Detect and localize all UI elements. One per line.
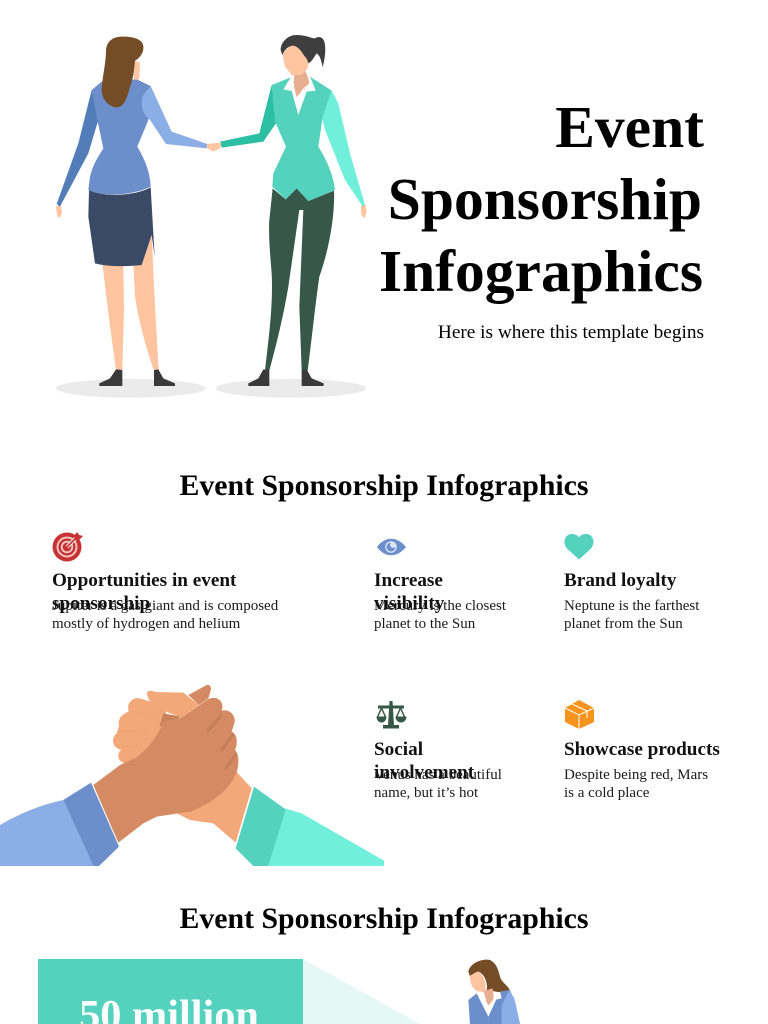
heading: section 2: Event Sponsorship Infographics (180, 902, 588, 935)
title: Infographics (379, 238, 703, 304)
item: showcase products: Despite being red, Mars (564, 767, 708, 783)
item: social involvement (374, 701, 502, 801)
item: increase visibility: Mercury is the closest (374, 598, 507, 614)
item: brand loyalty: Neptune is the farthest (564, 598, 700, 614)
item: opportunities in event sponsorship: mostly of hydrogen and helium (52, 616, 241, 632)
icon: handshake (207, 143, 221, 152)
illustration: clasped hands (0, 685, 384, 866)
heading: section 1: Event Sponsorship Infographics (180, 469, 588, 502)
item: showcase products (564, 700, 720, 801)
title: Sponsorship (388, 166, 702, 232)
title (379, 94, 704, 304)
item: brand loyalty: Brand loyalty (564, 570, 677, 591)
item: opportunities in event sponsorship: sponsorship (52, 593, 150, 614)
item: brand loyalty: planet from the Sun (564, 616, 683, 632)
icon: target (52, 532, 83, 562)
shadow: floor ellipses (56, 379, 366, 398)
icon: box (565, 700, 594, 729)
item: increase visibility: Increase (374, 570, 443, 591)
item: increase visibility: visibility (374, 593, 445, 614)
item: increase visibility (374, 539, 507, 632)
item: opportunities in event sponsorship: Jupiter is a gas giant and is composed (52, 598, 279, 614)
item: opportunities in event sponsorship: Opportunities in event (52, 570, 237, 591)
figure: left woman (56, 37, 207, 386)
title: Event (555, 94, 704, 160)
pointer wedge (303, 959, 420, 1024)
icon: scales (376, 701, 406, 728)
item: increase visibility: planet to the Sun (374, 616, 476, 632)
item: showcase products: Showcase products (564, 739, 720, 760)
figure: woman presenter (468, 960, 520, 1024)
item: opportunities in event sponsorship (52, 532, 279, 632)
item: social involvement: name, but it’s hot (374, 785, 479, 801)
icon: eye (377, 539, 406, 555)
figure: right woman (220, 35, 367, 386)
sleeve: left blue (0, 783, 119, 866)
hand: right lighter hand (117, 691, 252, 843)
illustration: two women shaking hands (56, 35, 367, 398)
item: brand loyalty (564, 534, 700, 632)
item: social involvement: involvement (374, 762, 475, 783)
item: social involvement: Venus has a beautiful (374, 767, 502, 783)
item: showcase products: is a cold place (564, 785, 650, 801)
icon: heart (565, 534, 593, 560)
sleeve: right teal (236, 787, 384, 866)
hand: left darker hand (93, 685, 238, 843)
item: social involvement: Social (374, 739, 423, 760)
subtitle: Here is where this template begins (438, 322, 704, 343)
stat block: 50 million (38, 959, 420, 1024)
